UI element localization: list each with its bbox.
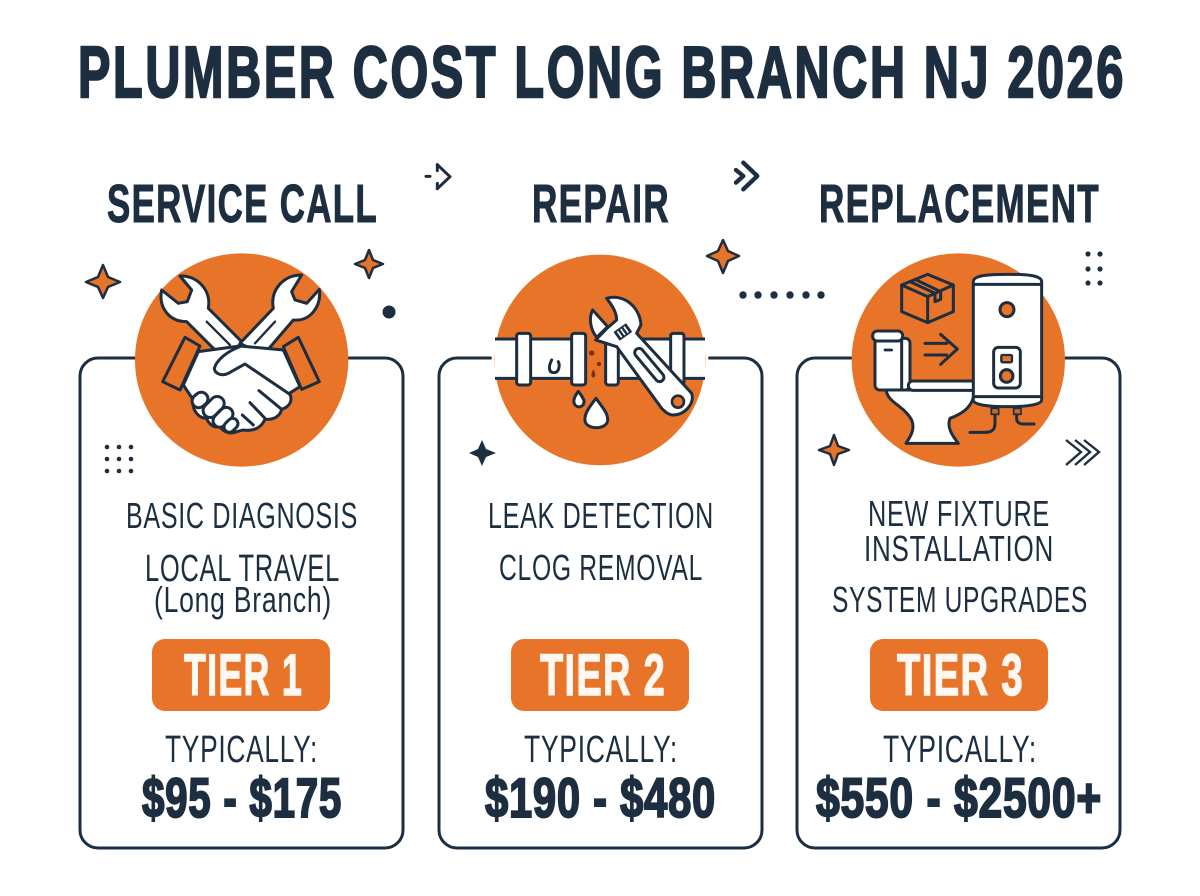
decorative: sparkles and dots [469, 240, 825, 466]
list: replacement items: INSTALLATION [864, 528, 1054, 569]
list: replacement items [832, 493, 1088, 620]
badge: tier 2 [511, 639, 689, 711]
list: service call items: BASIC DIAGNOSIS [126, 495, 358, 536]
list: replacement items: NEW FIXTURE [868, 493, 1050, 534]
badge: tier 3: TIER 3 [897, 643, 1024, 708]
list: repair items: CLOG REMOVAL [499, 547, 703, 588]
price: tier 2: $190 - $480 [485, 766, 716, 829]
list: replacement items: SYSTEM UPGRADES [832, 579, 1088, 620]
decorative: sparkles, dots and chevrons [819, 251, 1103, 465]
badge: tier 1 [152, 639, 330, 711]
list: repair items [488, 495, 714, 588]
decorative: sparkles and dots [86, 250, 396, 473]
price: tier 3: $550 - $2500+ [816, 766, 1102, 829]
panel: replacement [797, 174, 1120, 848]
badge: tier 1: TIER 1 [184, 643, 303, 708]
panel: service call [80, 174, 403, 848]
decorative arrow: double chevron [736, 163, 757, 189]
list: repair items: LEAK DETECTION [488, 495, 714, 536]
price: tier 3: TYPICALLY: [883, 729, 1037, 771]
price: tier 3 [816, 729, 1102, 829]
price: tier 2 [485, 729, 716, 829]
price: tier 1 [142, 729, 342, 829]
badge: tier 3 [870, 639, 1048, 711]
card outline [439, 358, 762, 848]
decorative arrow: dashed outline [426, 165, 450, 189]
price: tier 1: TYPICALLY: [165, 729, 318, 771]
badge: tier 2: TIER 2 [540, 643, 666, 708]
icon: toilet, box and water heater [852, 253, 1065, 467]
heading: service call: SERVICE CALL [107, 174, 378, 234]
panel: repair [439, 174, 825, 848]
card outline [80, 358, 403, 848]
list: service call items [126, 495, 358, 620]
price: tier 2: TYPICALLY: [524, 729, 678, 771]
icon: handshake and crossed wrenches [135, 253, 348, 467]
heading: repair: REPAIR [532, 174, 670, 234]
list: service call items: (Long Branch) [154, 579, 332, 620]
icon: leaking pipe and adjustable wrench [492, 255, 708, 465]
list: service call items: LOCAL TRAVEL [145, 548, 340, 590]
card outline [797, 358, 1120, 848]
price: tier 1: $95 - $175 [142, 766, 342, 829]
